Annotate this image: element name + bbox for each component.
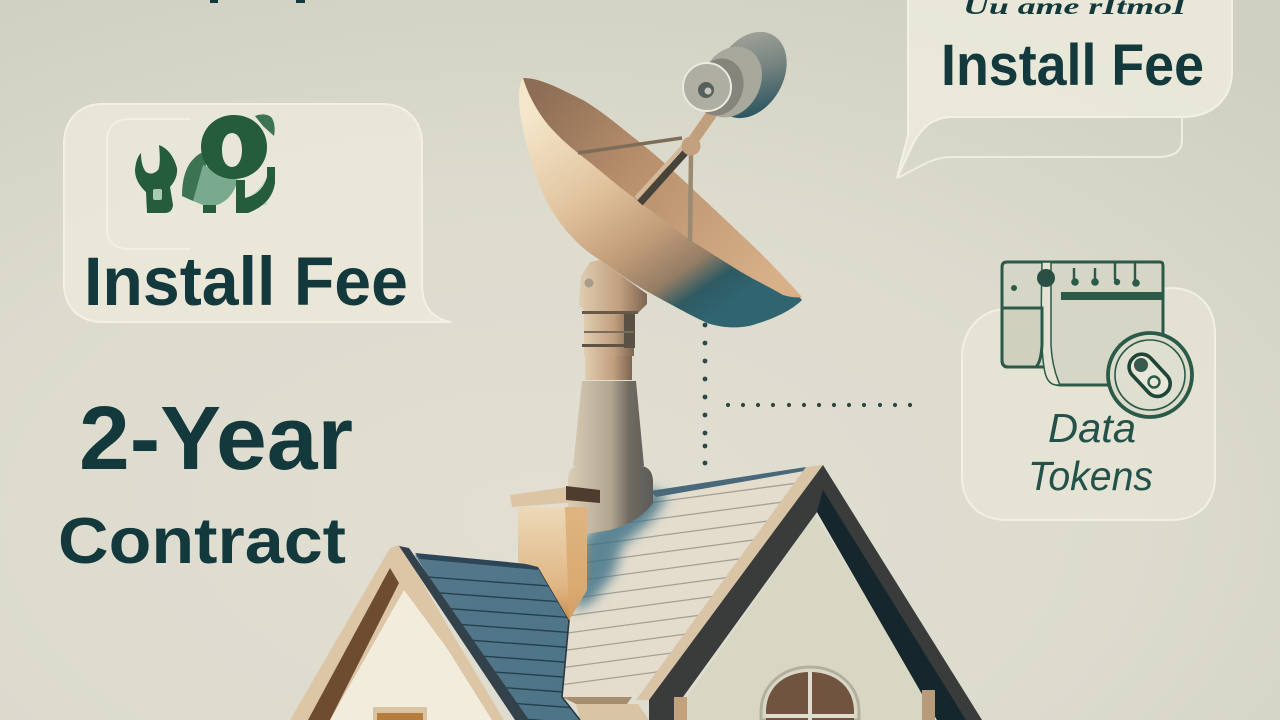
roof top shade	[650, 467, 806, 497]
clipped top heading fragments	[210, 0, 305, 3]
icon: device	[1002, 262, 1192, 417]
shingle lines	[564, 482, 794, 686]
left gable brown trim	[308, 568, 399, 720]
icon: tools	[135, 114, 275, 213]
blue roof top edge	[415, 553, 538, 570]
arched window	[760, 667, 860, 720]
upper segment	[585, 355, 632, 380]
speech bubble	[897, 0, 1232, 178]
blue roof	[415, 555, 580, 720]
lnb housing	[683, 19, 802, 131]
small window	[373, 707, 427, 720]
tapered pillar	[573, 381, 644, 466]
feed struts	[578, 138, 682, 153]
label: install fee: Install Fee	[941, 33, 1204, 98]
mast	[568, 260, 653, 535]
dotted connector	[703, 323, 912, 465]
right wall post	[922, 690, 935, 720]
left gable tan trim	[290, 545, 504, 720]
arm junction	[682, 136, 700, 156]
illustration: house and mast	[290, 260, 982, 720]
rounded panel	[962, 288, 1215, 520]
roof valley edge	[538, 567, 580, 720]
dark roof rake	[399, 546, 529, 720]
label: tokens: Tokens	[1028, 453, 1153, 499]
eave ledge	[562, 697, 632, 704]
joint	[579, 260, 647, 313]
contract: Contract	[58, 504, 346, 577]
illustration: satellite dish	[519, 19, 802, 327]
back bubble outline	[897, 117, 1182, 178]
dish inner bowl	[523, 78, 802, 297]
2-year: 2-Year	[79, 389, 353, 489]
panel: data tokens	[962, 262, 1215, 520]
panel: left install fee callout	[64, 104, 451, 322]
text block: 2-year contract	[58, 389, 353, 577]
light right roof	[562, 470, 803, 697]
right gable wall	[687, 515, 922, 720]
collar	[568, 466, 653, 535]
right gable dark trim	[649, 465, 982, 720]
inner icon outline	[107, 119, 190, 249]
label: install fee: Install Fee	[84, 243, 408, 320]
left wall	[330, 590, 500, 720]
blue roof lines	[429, 576, 570, 720]
label: data: Data	[1048, 405, 1136, 451]
speech bubble	[64, 104, 451, 322]
panel: top right install fee callout	[897, 0, 1232, 178]
feed arm	[640, 145, 692, 203]
chimney	[510, 486, 600, 620]
tan roof edge	[636, 465, 823, 700]
neck	[582, 312, 635, 356]
dormer base	[576, 704, 649, 720]
left post	[674, 697, 687, 720]
left tan rake	[397, 553, 503, 720]
dish outer shell	[519, 78, 802, 327]
roof shadow	[574, 488, 668, 612]
